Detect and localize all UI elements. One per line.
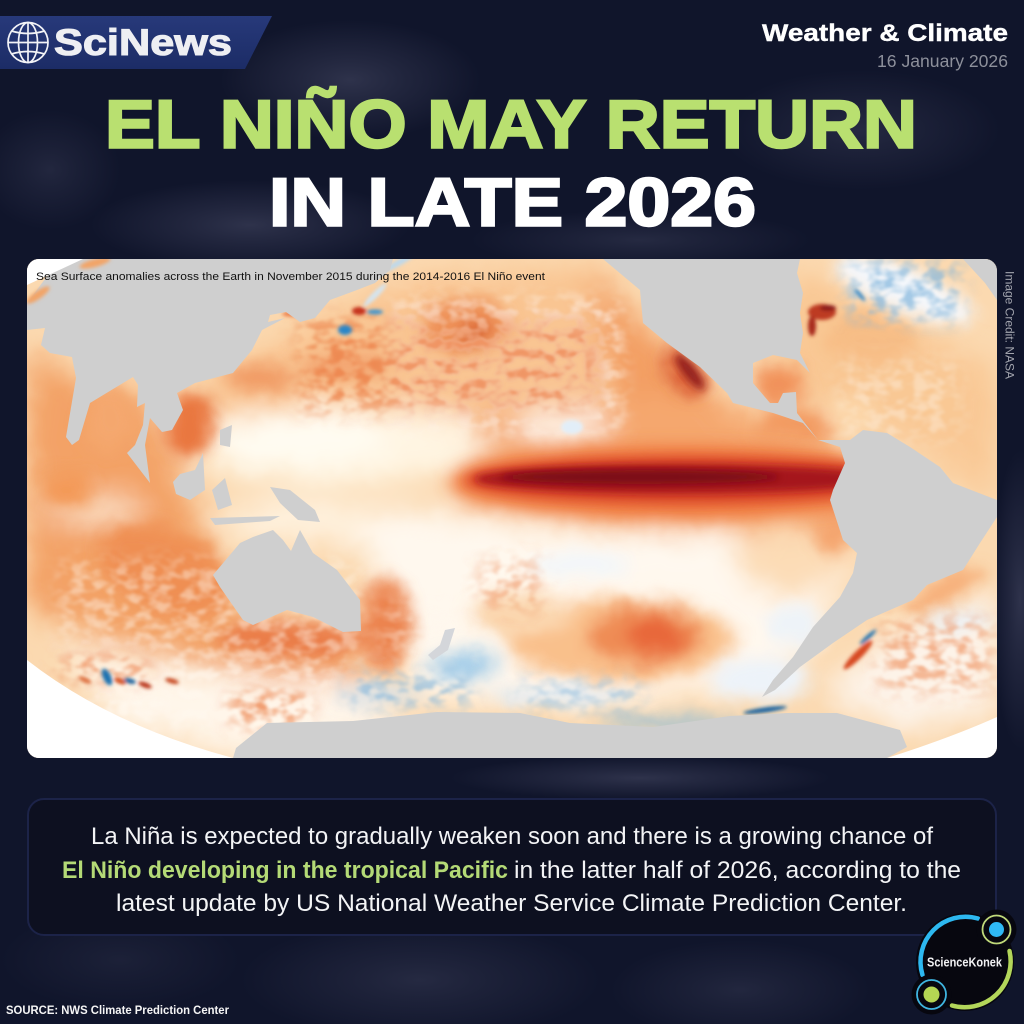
category and date: 16 January 2026	[877, 51, 1008, 71]
land: Antarctica	[233, 712, 907, 758]
category and date	[762, 20, 1008, 71]
top-left ocean fragments	[27, 259, 112, 306]
panel: summary text: latest update by US National Weather Service Climate Prediction Center.	[116, 890, 907, 917]
panel: summary text: El Niño developing in the tropical Pacific	[62, 857, 508, 884]
ocean temperature anomalies	[27, 242, 997, 758]
land: New Zealand	[428, 628, 455, 660]
land masses	[27, 259, 997, 758]
mottled texture	[60, 260, 990, 730]
header banner: SciNews	[0, 16, 272, 69]
image credit: Image Credit: NASA	[1002, 271, 1014, 379]
title: IN LATE 2026	[269, 164, 756, 240]
land: islands of south-east Asia	[173, 425, 320, 525]
brand name: SciNews	[54, 22, 232, 63]
source: SOURCE: NWS Climate Prediction Center	[6, 1005, 230, 1017]
panel: summary text	[28, 799, 996, 935]
title	[105, 86, 917, 240]
panel: sea surface anomaly map	[24, 242, 997, 758]
title: EL NIÑO MAY RETURN	[105, 86, 917, 162]
equatorial warm tongue	[450, 446, 915, 518]
category and date: Weather & Climate	[762, 20, 1008, 47]
logo: ScienceKonek	[912, 910, 1016, 1014]
icon: globe	[8, 22, 48, 62]
logo: ScienceKonek: ScienceKonek	[927, 956, 1002, 970]
map background outside projection	[27, 259, 997, 758]
land: Asia	[27, 259, 393, 483]
land: Australia	[213, 530, 361, 632]
land: South America and Africa	[762, 430, 997, 697]
sharp current features	[78, 249, 878, 716]
map caption: Sea Surface anomalies across the Earth in November 2015 during the 2014-2016 El Niño event	[36, 271, 546, 283]
land: north-east corner	[963, 259, 997, 300]
panel: summary text: La Niña is expected to gradually weaken soon and there is a growing chance of	[91, 823, 933, 850]
panel: summary text: in the latter half of 2026, according to the	[514, 857, 961, 884]
land: North and Central America	[603, 259, 818, 440]
